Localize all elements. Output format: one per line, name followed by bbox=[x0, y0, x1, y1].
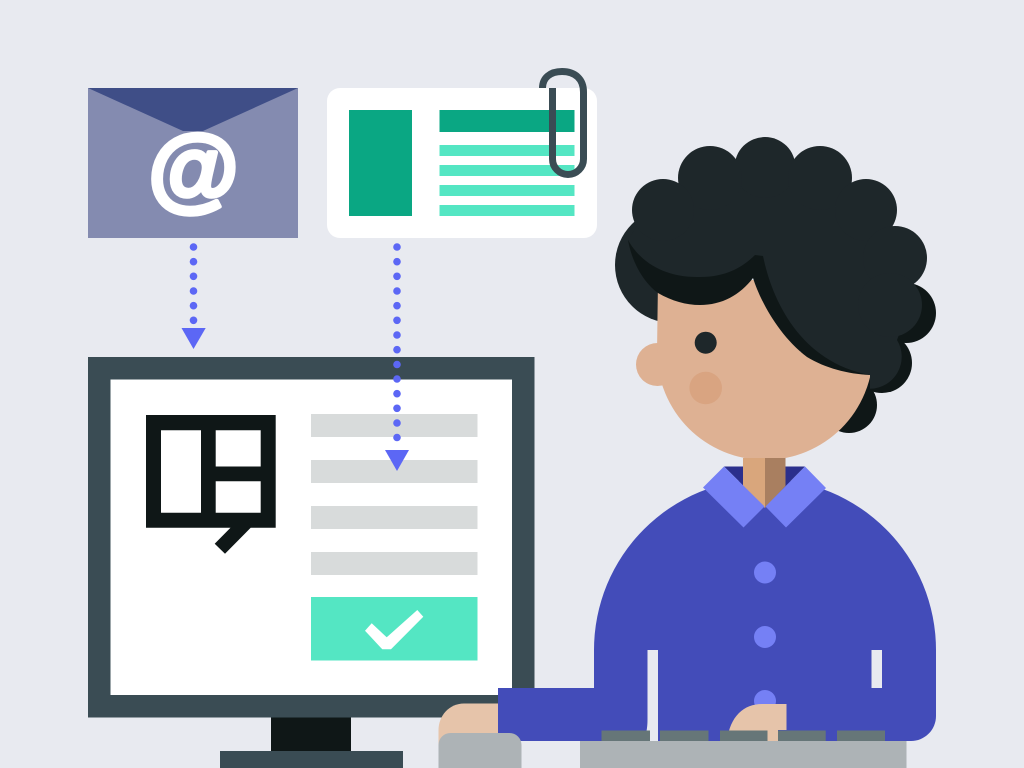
neck shadow bbox=[765, 458, 786, 508]
neck bbox=[743, 458, 765, 508]
computer mouse bbox=[438, 733, 522, 768]
form fields bbox=[311, 414, 478, 575]
monitor stand bbox=[271, 717, 351, 751]
keyboard bbox=[580, 730, 906, 768]
icon: check mark bbox=[365, 610, 423, 649]
at sign: @ bbox=[148, 116, 239, 220]
ear bbox=[636, 343, 679, 386]
monitor bezel bbox=[88, 357, 534, 718]
document heading bar bbox=[440, 110, 574, 132]
eye bbox=[695, 332, 717, 354]
envelope flap bbox=[88, 88, 298, 131]
arrow: document to form bbox=[385, 243, 409, 471]
face bbox=[657, 280, 873, 460]
person bbox=[438, 137, 936, 745]
back hair bbox=[821, 283, 936, 433]
shirt buttons bbox=[754, 562, 776, 712]
keyboard keys bbox=[602, 730, 885, 741]
left hand bbox=[438, 704, 498, 745]
arrow: envelope to monitor bbox=[182, 243, 206, 349]
left sleeve gap bbox=[644, 650, 658, 741]
cheek bbox=[689, 372, 722, 404]
icon: paperclip bbox=[542, 72, 584, 174]
monitor screen bbox=[110, 380, 512, 695]
collar right bbox=[766, 466, 826, 528]
monitor bbox=[88, 357, 534, 768]
fringe shadow bbox=[628, 230, 870, 375]
neckline bbox=[724, 466, 805, 507]
monitor base bbox=[220, 751, 403, 768]
shirt torso bbox=[498, 479, 936, 741]
submit button bbox=[311, 597, 478, 660]
left back hair bbox=[615, 207, 731, 323]
document text lines bbox=[440, 145, 574, 216]
icon: email envelope bbox=[88, 88, 298, 238]
right hand bbox=[727, 704, 786, 741]
icon: layout speech bubble bbox=[146, 415, 276, 554]
right sleeve gap bbox=[872, 650, 882, 688]
document image block bbox=[349, 110, 412, 216]
collar left bbox=[703, 466, 764, 528]
panel: document card bbox=[327, 88, 597, 238]
front hair bbox=[628, 137, 927, 389]
